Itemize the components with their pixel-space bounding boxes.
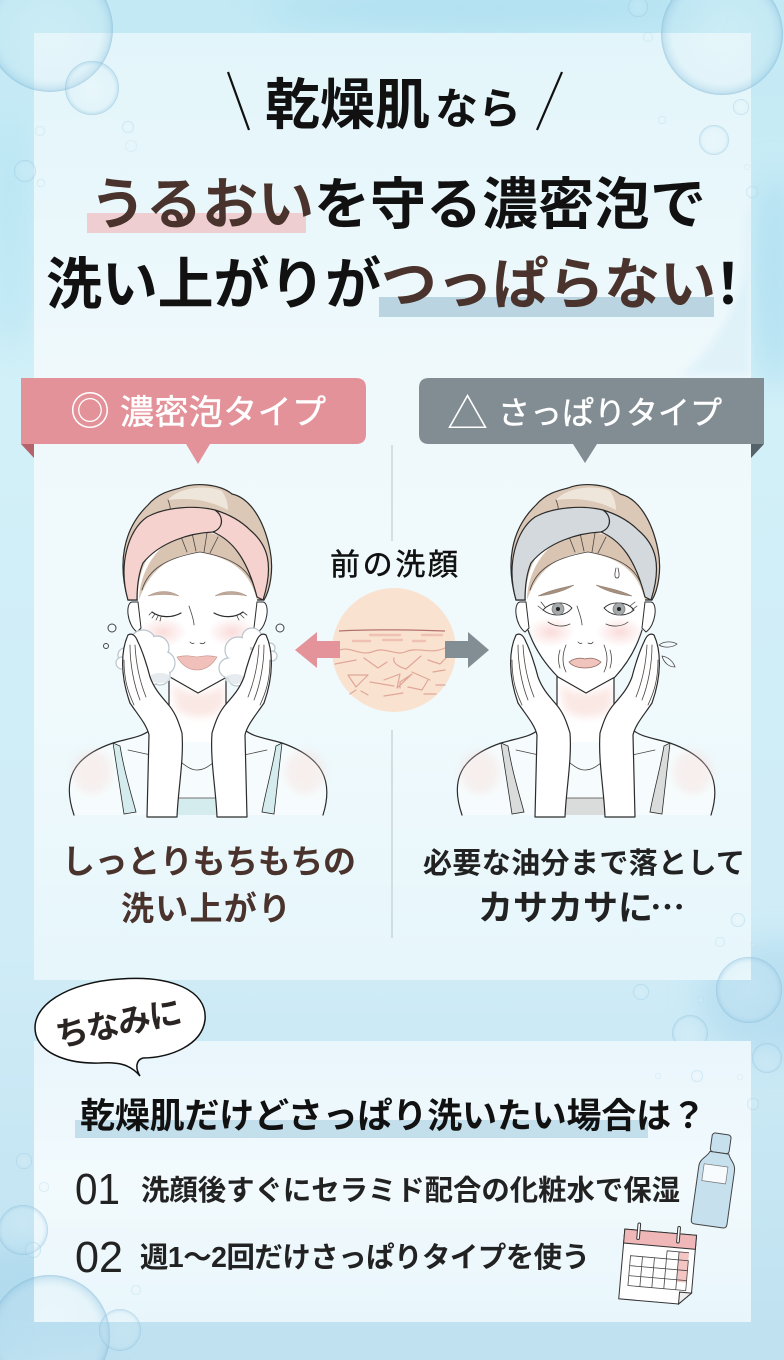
heading: 乾燥肌なら: 乾燥肌なら [265, 74, 521, 136]
title line 1: うるおいを守る濃密泡で [90, 173, 706, 236]
bubbles lower [0, 1070, 759, 1360]
wrinkles and lips [558, 645, 612, 672]
open eyes [538, 602, 637, 626]
small bubbles [104, 624, 284, 648]
ribbon: 濃密泡タイプ: ◎ [70, 390, 110, 434]
speech bubble: ちなみに [35, 978, 205, 1076]
caption: dry result: カサカサに… [478, 880, 685, 931]
caption: dry result: 必要な油分まで落として [423, 847, 745, 880]
highlight: blue [379, 297, 714, 317]
bubbles lower right [633, 913, 782, 1073]
panel: tips [34, 1041, 751, 1322]
skin cross-section [332, 588, 456, 712]
tip 01 [75, 1165, 680, 1214]
bubbles top [0, 0, 783, 198]
tip 02: 週1〜2回だけさっぱりタイプを使う [140, 1242, 590, 1274]
ribbon: さっぱりタイプ [419, 378, 764, 463]
illustration: moisturized woman with foam [69, 485, 327, 817]
ribbon: さっぱりタイプ: △ [447, 380, 488, 440]
closed eyes and brows [148, 592, 247, 621]
arrow: left pink [295, 632, 340, 668]
sweat drop [615, 568, 619, 578]
label: 前の洗顔: 前の洗顔 [330, 549, 458, 582]
tips heading: 乾燥肌だけどさっぱり洗いたい場合は？ [80, 1097, 706, 1136]
speech bubble: ちなみに: ちなみに [52, 993, 185, 1054]
panel: comparison [34, 33, 751, 980]
title line 2: 洗い上がりがつっぱらない [46, 253, 716, 316]
main title [46, 173, 756, 317]
ribbon: 濃密泡タイプ [21, 378, 366, 464]
ribbon: 濃密泡タイプ: 濃密泡タイプ [120, 394, 326, 432]
arrow: right gray [445, 632, 489, 668]
panel wash [680, 200, 751, 376]
illustration: dry skin woman [457, 485, 715, 817]
icon: lotion bottle [691, 1131, 739, 1228]
foam clusters [116, 628, 277, 686]
worried brows [538, 585, 632, 596]
tip 01: 洗顔後すぐにセラミド配合の化粧水で保湿 [141, 1175, 680, 1207]
tip 01: 01 [75, 1165, 120, 1214]
tip 02: 02 [75, 1233, 123, 1282]
caption: moist result: 洗い上がり [121, 890, 291, 927]
highlight: pink [87, 213, 306, 233]
caption: dry result [423, 847, 745, 931]
tip 02 [75, 1233, 590, 1282]
caption: moist result: しっとりもちもちの [62, 843, 356, 880]
tear drops [659, 642, 677, 667]
caption: moist result [62, 843, 356, 927]
icon: calendar [619, 1223, 697, 1305]
exclamation: ！ [700, 253, 756, 316]
ribbon: さっぱりタイプ: さっぱりタイプ [498, 395, 722, 431]
smile lips [177, 656, 217, 670]
divider [391, 445, 393, 938]
